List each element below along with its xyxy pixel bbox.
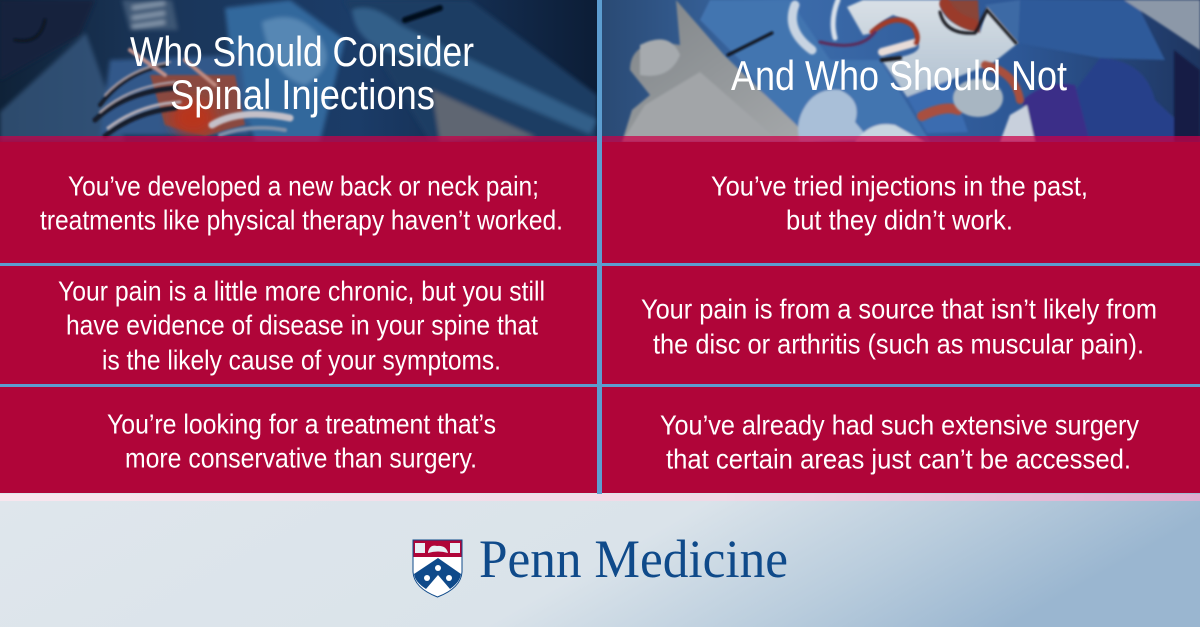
text: left row 1: You’ve developed a new back or neck pain; (68, 170, 539, 202)
text: left row 3: more conservative than surgery. (125, 442, 477, 474)
translucent strip under header images (0, 136, 1200, 142)
table dividers (0, 0, 1200, 494)
text: left row 1: treatments like physical therapy haven’t worked. (40, 204, 563, 236)
text: right row 2: Your pain is from a source that isn’t likely from (641, 294, 1157, 324)
icon: Penn shield (413, 540, 462, 597)
heading: who should consider: Spinal Injections (170, 71, 435, 118)
text: right row 1: but they didn’t work. (786, 204, 1013, 236)
heading: who should consider (130, 28, 474, 118)
text: right row 1: You’ve tried injections in the past, (711, 170, 1088, 202)
panel: red table background (0, 142, 1200, 493)
text: left row 2: have evidence of disease in your spine that (66, 310, 538, 340)
panel: left header image (0, 0, 597, 142)
text: right row 3: that certain areas just can’t be accessed. (666, 444, 1131, 474)
panel: right header image (602, 0, 1200, 142)
text: right row 2: the disc or arthritis (such as muscular pain). (653, 328, 1144, 360)
logo wordmark: Penn Medicine (479, 529, 788, 589)
heading: and who should not: And Who Should Not (731, 52, 1067, 99)
illustration: ribs (15, 8, 440, 136)
footer background (0, 493, 1200, 627)
text: right row 3: You’ve already had such extensive surgery (660, 410, 1139, 440)
text: right row 3 (660, 410, 1139, 474)
heading: who should consider: Who Should Consider (130, 28, 474, 75)
illustration: red nerve and puzzle details (728, 0, 1020, 116)
text: left row 2 (58, 276, 545, 376)
text: right row 1 (711, 170, 1088, 236)
text: right row 2 (641, 294, 1157, 360)
text: left row 2: Your pain is a little more chronic, but you still (58, 276, 545, 306)
text: left row 1 (40, 170, 563, 236)
text: left row 3: You’re looking for a treatment that’s (107, 408, 496, 440)
text: left row 3 (107, 408, 496, 474)
text: left row 2: is the likely cause of your symptoms. (102, 344, 501, 376)
pale strip under table (0, 494, 1200, 501)
